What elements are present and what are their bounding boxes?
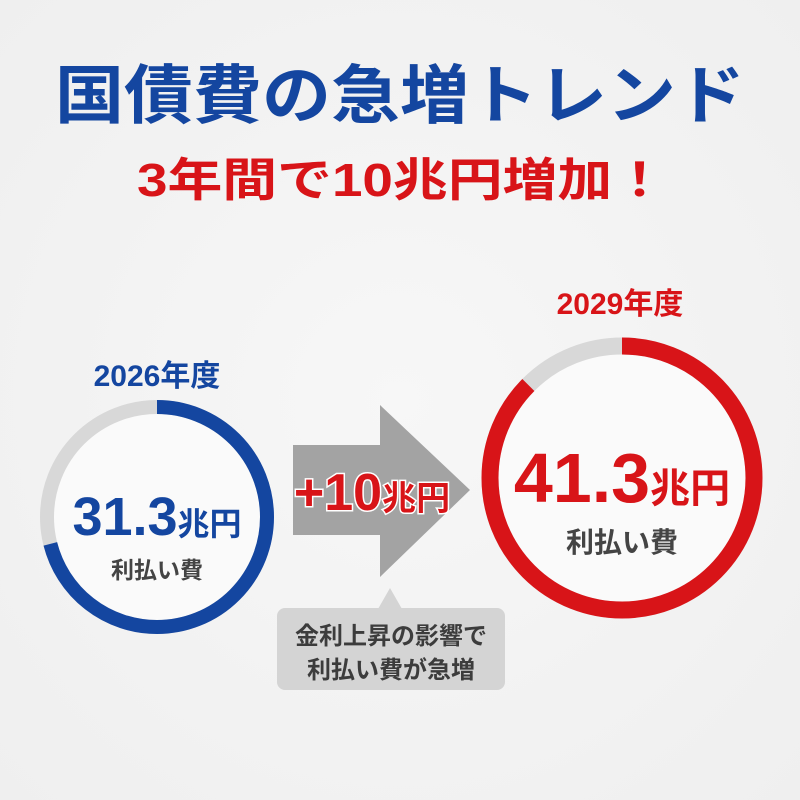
label: 2029: 2029年度 (557, 288, 683, 321)
caption: 利払い費 (566, 527, 678, 558)
donut: 2029 (490, 346, 754, 610)
arrow label: +10兆円 (294, 464, 450, 522)
donut: 2026 (47, 407, 267, 627)
value: 41.3: 41.3兆円 (514, 439, 730, 517)
subtitle: 3年間で10兆円増加！ (137, 154, 667, 206)
callout: 金利上昇の影響で (295, 623, 487, 650)
callout: 利払い費が急増 (307, 656, 475, 684)
title: 国債費の急増トレンド (55, 60, 745, 132)
caption: 利払い費 (111, 557, 203, 583)
value: 31.3: 31.3兆円 (72, 487, 242, 547)
callout (277, 588, 505, 690)
arrow (293, 405, 470, 577)
label: 2026: 2026年度 (94, 360, 220, 393)
